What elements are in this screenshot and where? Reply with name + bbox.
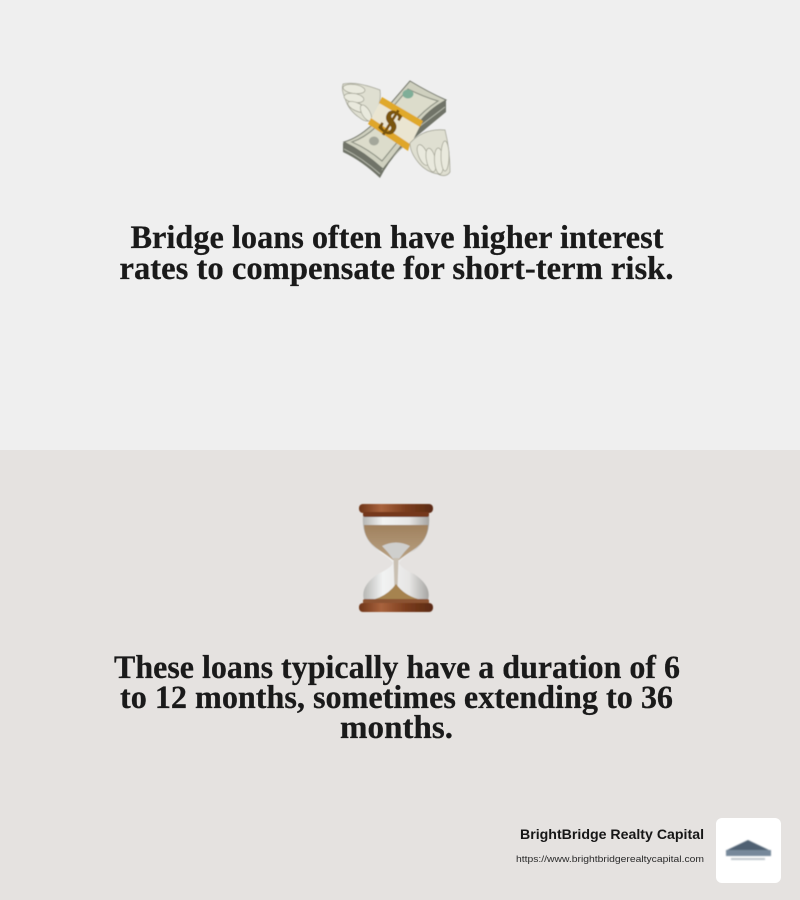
glass — [363, 516, 429, 600]
heading: interest rates: Bridge loans often have higher interest — [130, 220, 664, 256]
heading: interest rates: rates to compensate for short-term risk. — [120, 251, 674, 287]
dollar sign: $ — [373, 101, 408, 144]
paper band — [369, 98, 422, 150]
right wing — [410, 130, 450, 176]
brand name: BrightBridge Realty Capital — [520, 826, 704, 842]
sand bottom — [375, 584, 418, 599]
heading: loan duration: These loans typically have a duration of 6 — [114, 650, 680, 686]
icon: money with wings — [342, 81, 450, 178]
panel: top background — [0, 0, 800, 450]
top cap — [359, 504, 433, 513]
panel: bottom background — [0, 450, 800, 900]
sand top — [364, 525, 428, 560]
bill top — [344, 81, 446, 169]
website url: https://www.brightbridgerealtycapital.com — [516, 854, 704, 865]
heading: loan duration: months. — [340, 710, 453, 746]
icon: hourglass — [359, 504, 433, 612]
icon: logo roof — [726, 840, 771, 860]
left wing — [342, 83, 380, 123]
yellow band edges — [379, 97, 423, 127]
heading: interest rates — [120, 220, 674, 287]
heading: loan duration — [114, 650, 680, 746]
stack side — [343, 100, 446, 178]
bottom cap — [363, 599, 429, 604]
logo card — [716, 818, 781, 883]
heading: loan duration: to 12 months, sometimes extending to 36 — [120, 680, 673, 716]
